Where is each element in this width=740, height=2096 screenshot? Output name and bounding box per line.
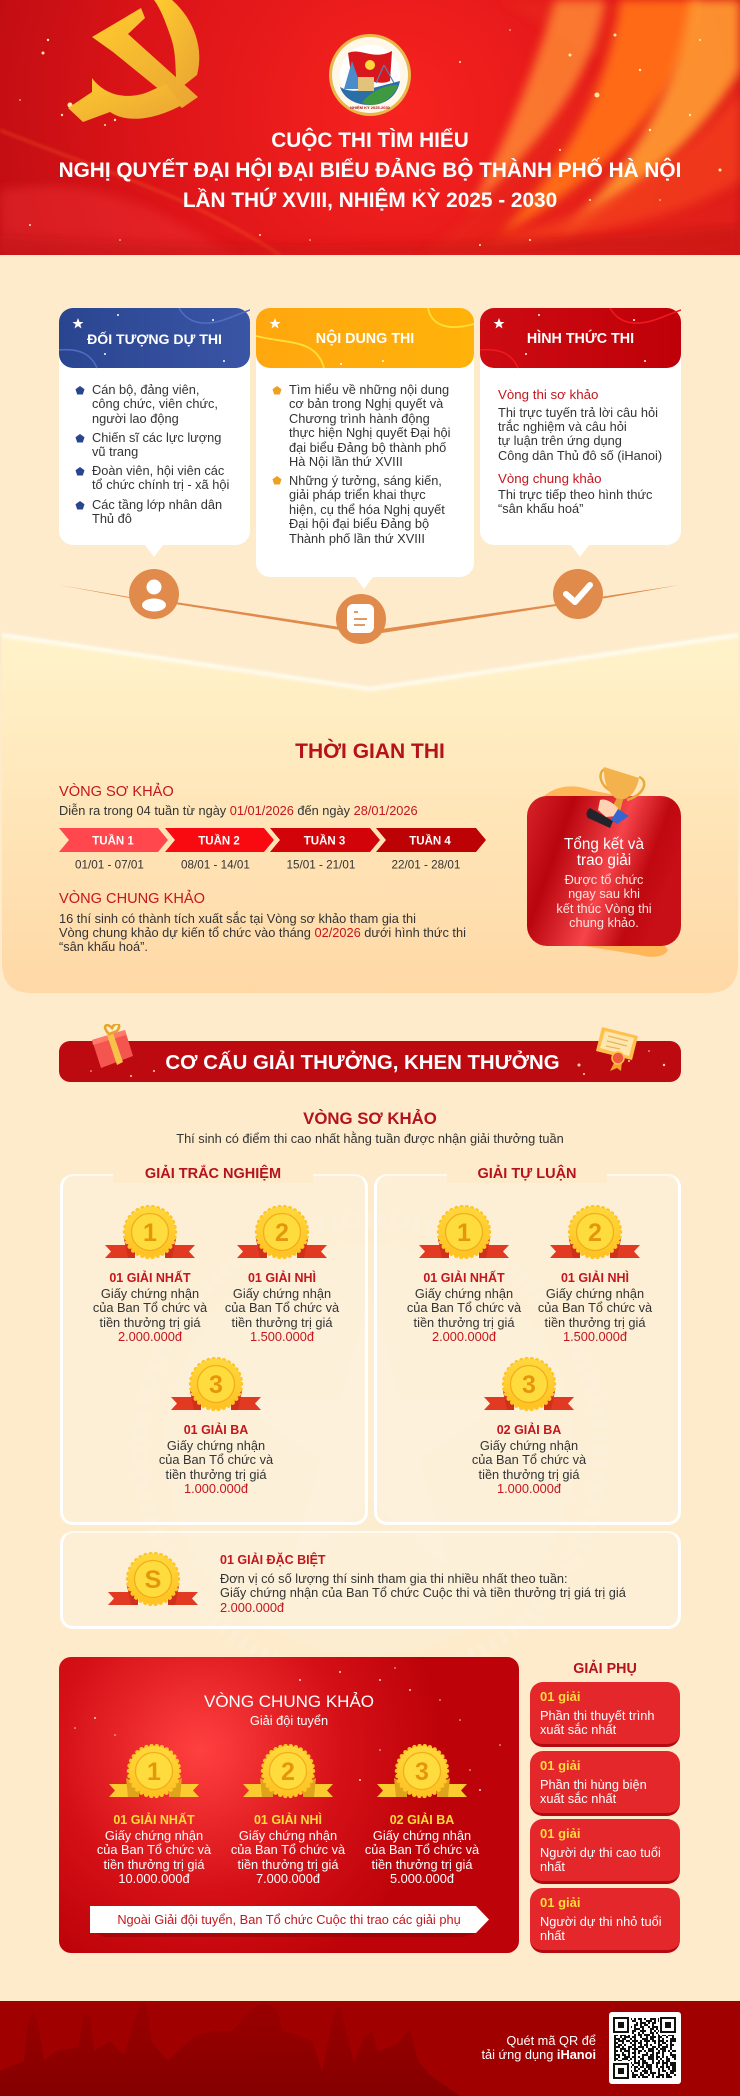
panel: giải tự luận — [374, 1174, 681, 1525]
text — [556, 836, 652, 930]
prize text: của Ban Tổ chức và — [159, 1452, 273, 1467]
card: giải phụ 2 — [530, 1751, 680, 1816]
prize text: Giấy chứng nhận — [546, 1286, 644, 1301]
text: vòng sơ khảo dates: Diễn ra trong 04 tuần từ ngày 01/01/2026 đến ngày 28/01/2026 — [59, 803, 418, 818]
icon: medal 3 — [171, 1357, 261, 1412]
icon: trophy — [587, 767, 644, 828]
text: Tổng kết và — [564, 836, 644, 853]
heading: giải trắc nghiệm — [113, 1165, 313, 1183]
icon: medal 1: 1 — [143, 1219, 157, 1247]
connector line — [62, 585, 679, 633]
icon: check — [553, 569, 603, 619]
heading: ĐỐI TƯỢNG DỰ THI — [87, 331, 222, 347]
week chevrons: TUẦN 2 — [198, 834, 240, 848]
bullet list: Đại hội đại biểu Đảng bộ — [289, 516, 429, 531]
prize text: của Ban Tổ chức và — [93, 1300, 207, 1315]
card: giải phụ 1: xuất sắc nhất — [540, 1722, 616, 1737]
subtitle: Giải đội tuyển — [250, 1713, 328, 1728]
panel: giải đặc biệt — [60, 1531, 681, 1629]
title: CƠ CẤU GIẢI THƯỞNG, KHEN THƯỞNG — [165, 1052, 560, 1074]
heading: vòng sơ khảo: VÒNG SƠ KHẢO — [59, 784, 174, 800]
icon: medal 3: 3 — [209, 1371, 223, 1399]
bullet list: Cán bộ, đảng viên, — [92, 382, 199, 397]
special prize text: Đơn vị có số lượng thí sinh tham gia thi nhiều nhất theo tuần: — [220, 1571, 568, 1586]
prize text: Giấy chứng nhận — [480, 1438, 578, 1453]
prize text: Giấy chứng nhận — [167, 1438, 265, 1453]
icon: medal 3: 3 — [415, 1758, 429, 1786]
prize text: 5.000.000đ — [390, 1871, 454, 1886]
panel: nội dung thi — [256, 308, 474, 589]
bullet list: Các tầng lớp nhân dân — [92, 497, 222, 512]
card: giải phụ 3: nhất — [540, 1859, 565, 1874]
card: giải phụ 4: 01 giải — [540, 1895, 580, 1910]
text block: tự luận trên ứng dụng — [498, 433, 622, 448]
prize text: của Ban Tổ chức và — [407, 1300, 521, 1315]
icon: person — [129, 569, 179, 619]
text: vòng chung khảo: Vòng chung khảo dự kiến tổ chức vào tháng 02/2026 dưới hình thức thi — [59, 925, 466, 940]
text: qr prompt: Quét mã QR để — [506, 2033, 596, 2048]
week chevrons — [59, 828, 486, 872]
title: NGHỊ QUYẾT ĐẠI HỘI ĐẠI BIỂU ĐẢNG BỘ THÀNH PHỐ HÀ NỘI — [59, 159, 681, 182]
week chevrons: 15/01 - 21/01 — [287, 858, 355, 872]
bullet list: công chức, viên chức, — [92, 396, 218, 411]
prize text: 1.500.000đ — [250, 1329, 314, 1344]
prize text: tiền thưởng trị giá — [100, 1315, 200, 1330]
prize text: tiền thưởng trị giá — [238, 1857, 338, 1872]
text: vòng chung khảo: “sân khấu hoá”. — [59, 939, 148, 954]
prize text: của Ban Tổ chức và — [97, 1842, 211, 1857]
text block: trắc nghiệm và câu hỏi — [498, 419, 627, 434]
qr code — [609, 2012, 681, 2084]
heading: thời gian thi: THỜI GIAN THI — [295, 740, 445, 763]
bullet list: hiện, cụ thể hóa Nghị quyết — [289, 502, 445, 517]
bullet list: Chương trình hành động — [289, 411, 430, 426]
card: giải phụ 1 — [530, 1682, 680, 1747]
bullet list: Đoàn viên, hội viên các — [92, 463, 224, 478]
prize text — [407, 1270, 522, 1344]
prize text: tiền thưởng trị giá — [545, 1315, 645, 1330]
prize text: của Ban Tổ chức và — [472, 1452, 586, 1467]
prize text: 1.500.000đ — [563, 1329, 627, 1344]
icon: medal 2 — [243, 1744, 333, 1800]
icon: medal 2 — [550, 1205, 640, 1260]
bullet list: tổ chức chính trị - xã hội — [92, 477, 229, 492]
subtitle: Thí sinh có điểm thi cao nhất hằng tuần được nhận giải thưởng tuần — [176, 1131, 564, 1146]
week chevrons: 08/01 - 14/01 — [181, 858, 250, 872]
footer — [0, 2001, 740, 2096]
bullet list: Tìm hiểu về những nội dung — [289, 382, 449, 397]
bullet list — [76, 382, 229, 526]
text block: Thi trực tiếp theo hình thức — [498, 486, 652, 502]
icon: medal S — [108, 1552, 198, 1606]
prize text — [159, 1422, 274, 1496]
prize text: 2.000.000đ — [432, 1329, 496, 1344]
panel: giải trắc nghiệm — [60, 1174, 368, 1525]
bullet list — [272, 382, 451, 546]
text block — [498, 387, 662, 516]
prize text: Giấy chứng nhận — [239, 1828, 337, 1843]
icon: medal 2: 2 — [588, 1219, 602, 1247]
special prize text: Giấy chứng nhận của Ban Tổ chức Cuộc thi và tiền thưởng trị giá trị giá — [220, 1585, 626, 1600]
banner: cơ cấu giải thưởng — [59, 1024, 681, 1082]
prize text: tiền thưởng trị giá — [479, 1467, 579, 1482]
text block: Thi trực tuyến trả lời câu hỏi — [498, 404, 658, 420]
card: giải phụ 2: xuất sắc nhất — [540, 1791, 616, 1806]
special prize text — [220, 1552, 626, 1615]
text block: Công dân Thủ đô số (iHanoi) — [498, 448, 662, 463]
prize text: Giấy chứng nhận — [373, 1828, 471, 1843]
prize text — [538, 1270, 652, 1344]
prize text — [225, 1270, 340, 1344]
icon: document — [336, 594, 386, 644]
special prize text: 2.000.000đ — [220, 1600, 284, 1615]
heading: giải phụ: GIẢI PHỤ — [573, 1661, 637, 1677]
prize text: của Ban Tổ chức và — [538, 1300, 652, 1315]
icon: medal 2: 2 — [281, 1758, 295, 1786]
prize text: Giấy chứng nhận — [233, 1286, 331, 1301]
title: CUỘC THI TÌM HIỂU — [271, 129, 469, 152]
text: ngay sau khi — [568, 886, 640, 901]
card: giải phụ 2: 01 giải — [540, 1758, 580, 1773]
bullet list: Thủ đô — [92, 511, 132, 526]
prize text: 10.000.000đ — [118, 1871, 190, 1886]
heading: HÌNH THỨC THI — [527, 331, 634, 347]
prize text: tiền thưởng trị giá — [372, 1857, 472, 1872]
icon: medal 3 — [377, 1744, 467, 1800]
bullet list: cơ bản trong Nghị quyết và — [289, 396, 443, 411]
heading: giải tự luận: GIẢI TỰ LUẬN — [477, 1166, 577, 1182]
text block: Vòng thi sơ khảo — [498, 387, 598, 402]
prize text: 02 GIẢI BA — [497, 1423, 561, 1437]
week chevrons: TUẦN 4 — [409, 834, 451, 848]
icon: medal 3: 3 — [522, 1371, 536, 1399]
text: qr prompt: tải ứng dụng iHanoi — [481, 2047, 596, 2062]
callout arrow: Ngoài Giải đội tuyển, Ban Tổ chức Cuộc thi trao các giải phụ — [117, 1912, 461, 1927]
bullet list: Những ý tưởng, sáng kiến, — [289, 473, 442, 488]
prize text: 01 GIẢI NHẤT — [423, 1271, 505, 1285]
timeline section background — [1, 632, 739, 993]
card: giải phụ 4: Người dự thi nhỏ tuổi — [540, 1914, 662, 1929]
title — [59, 128, 681, 212]
bullet list: Thành phố lần thứ XVIII — [289, 531, 425, 546]
card: giải phụ 1: 01 giải — [540, 1689, 580, 1704]
heading: vòng chung khảo: VÒNG CHUNG KHẢO — [59, 891, 205, 907]
icon: medal 1 — [105, 1205, 195, 1260]
prize text — [84, 1811, 224, 1887]
card: giải phụ 3 — [530, 1819, 680, 1884]
prize text: Giấy chứng nhận — [415, 1286, 513, 1301]
prize text — [218, 1811, 358, 1887]
icon: medal 2: 2 — [275, 1219, 289, 1247]
card: giải phụ 3: Người dự thi cao tuổi — [540, 1845, 661, 1860]
card: giải phụ 4 — [530, 1888, 680, 1953]
skyline — [0, 2001, 470, 2096]
text: Được tổ chức — [565, 872, 643, 887]
icon: gift — [92, 1024, 133, 1068]
prize text: 01 GIẢI NHÌ — [248, 1271, 316, 1285]
prize text: 01 GIẢI NHẤT — [113, 1813, 195, 1827]
prize text: 01 GIẢI NHÌ — [254, 1813, 322, 1827]
prize text: 01 GIẢI NHÌ — [561, 1271, 629, 1285]
card: giải phụ 1: Phần thi thuyết trình — [540, 1708, 655, 1723]
prize text: 1.000.000đ — [184, 1481, 248, 1496]
icon: medal 1 — [109, 1744, 199, 1798]
prize text: của Ban Tổ chức và — [231, 1842, 345, 1857]
prize text: 02 GIẢI BA — [390, 1813, 454, 1827]
text: chung khảo. — [569, 915, 639, 930]
logo — [329, 34, 411, 116]
icon: medal 1 — [419, 1205, 509, 1260]
bullet list: Hà Nội lần thứ XVIII — [289, 454, 403, 469]
bullet list: vũ trang — [92, 444, 138, 459]
panel: tổng kết và trao giải — [527, 767, 681, 957]
text: trao giải — [577, 852, 631, 869]
card: giải phụ 4: nhất — [540, 1928, 565, 1943]
week chevrons: TUẦN 1 — [92, 834, 134, 848]
prize text: 7.000.000đ — [256, 1871, 320, 1886]
text: vòng chung khảo — [59, 910, 466, 954]
week chevrons: TUẦN 3 — [304, 834, 345, 848]
prize text: tiền thưởng trị giá — [232, 1315, 332, 1330]
prize text — [93, 1270, 208, 1344]
bullet list: giải pháp triển khai thực — [289, 487, 426, 502]
callout arrow — [90, 1906, 492, 1938]
card: giải phụ 3: 01 giải — [540, 1826, 580, 1841]
prize text — [352, 1811, 492, 1887]
text block: Vòng chung khảo — [498, 471, 602, 486]
icon: medal 1: 1 — [147, 1758, 161, 1786]
icon: medal 1: 1 — [457, 1219, 471, 1247]
heading: giải tự luận — [447, 1165, 607, 1183]
prize text: Giấy chứng nhận — [105, 1828, 203, 1843]
prize text: tiền thưởng trị giá — [104, 1857, 204, 1872]
prize text: của Ban Tổ chức và — [365, 1842, 479, 1857]
panel: hình thức thi — [480, 308, 681, 557]
prize text — [472, 1422, 586, 1496]
week chevrons: 22/01 - 28/01 — [392, 858, 460, 872]
prize text: 01 GIẢI BA — [184, 1423, 248, 1437]
panel: vòng chung khảo — [59, 1657, 519, 1953]
bullet list: thực hiện Nghị quyết Đại hội — [289, 425, 451, 440]
bullet list: người lao động — [92, 411, 179, 426]
text: qr prompt — [440, 2034, 596, 2063]
bullet list: đại biểu Đảng bộ thành phố — [289, 440, 446, 455]
panel: đối tượng dự thi — [59, 308, 250, 557]
icon: medal 2 — [237, 1205, 327, 1260]
prize text: của Ban Tổ chức và — [225, 1300, 339, 1315]
prize text: 01 GIẢI NHẤT — [109, 1271, 191, 1285]
bullet list: Chiến sĩ các lực lượng — [92, 430, 221, 445]
title: LẦN THỨ XVIII, NHIỆM KỲ 2025 - 2030 — [183, 189, 557, 212]
prize text: 1.000.000đ — [497, 1481, 561, 1496]
special prize text: 01 GIẢI ĐẶC BIỆT — [220, 1553, 326, 1567]
logo: NHIỆM KỲ 2025-2030 — [350, 105, 391, 110]
prize text: 2.000.000đ — [118, 1329, 182, 1344]
icon: certificate — [596, 1027, 638, 1071]
icon: medal S: S — [145, 1566, 161, 1594]
week chevrons: 01/01 - 07/01 — [75, 858, 144, 872]
text: vòng chung khảo: 16 thí sinh có thành tích xuất sắc tại Vòng sơ khảo tham gia thi — [59, 910, 416, 926]
heading: NỘI DUNG THI — [316, 331, 414, 347]
heading: giải trắc nghiệm: GIẢI TRẮC NGHIỆM — [145, 1166, 281, 1182]
heading: VÒNG CHUNG KHẢO — [204, 1692, 374, 1711]
prize text: tiền thưởng trị giá — [166, 1467, 266, 1482]
heading: vòng sơ khảo prizes: VÒNG SƠ KHẢO — [303, 1109, 437, 1128]
text: kết thúc Vòng thi — [556, 901, 652, 916]
prize text: tiền thưởng trị giá — [414, 1315, 514, 1330]
card: giải phụ 2: Phần thi hùng biện — [540, 1777, 647, 1792]
header banner — [0, 0, 740, 255]
prize text: Giấy chứng nhận — [101, 1286, 199, 1301]
icon: hammer and sickle — [68, 0, 200, 122]
prize watermark — [100, 1180, 640, 1680]
icon: medal 3 — [484, 1357, 574, 1412]
text block: “sân khấu hoá” — [498, 501, 583, 516]
